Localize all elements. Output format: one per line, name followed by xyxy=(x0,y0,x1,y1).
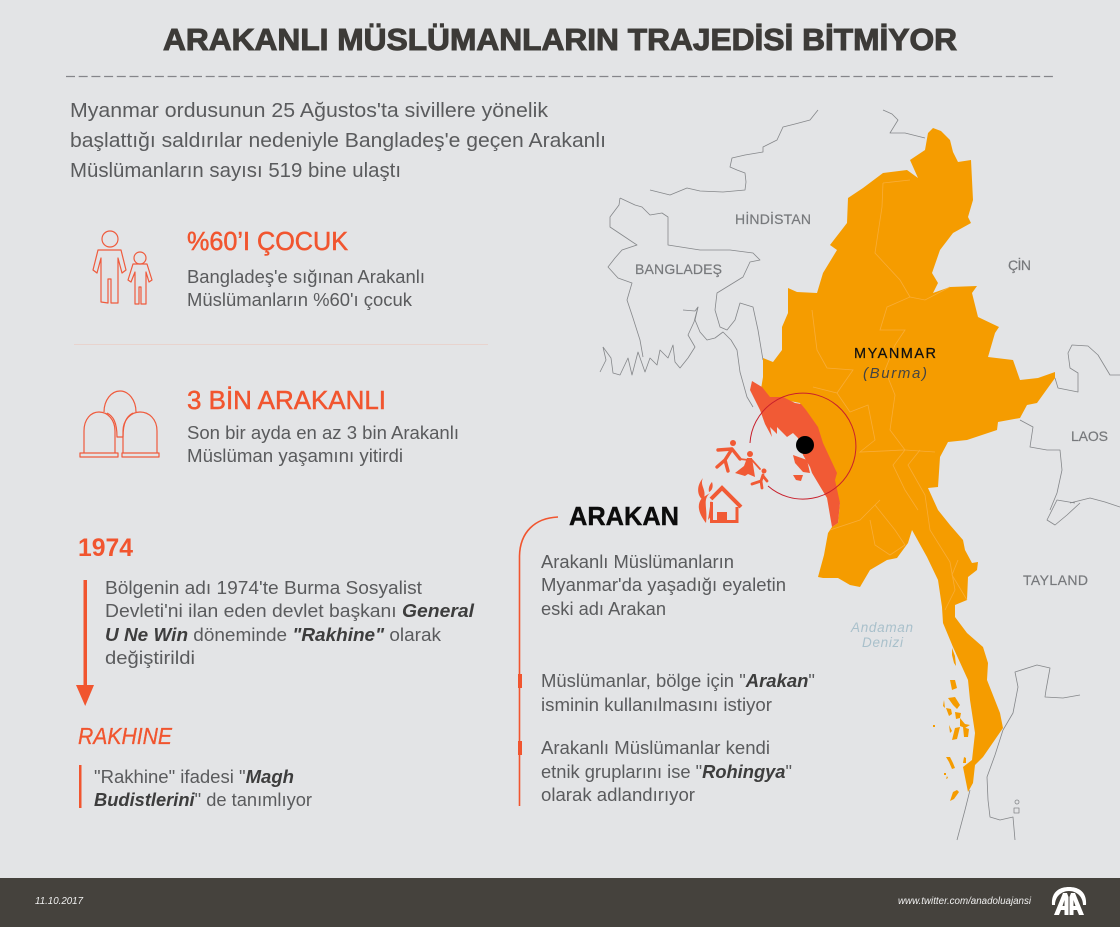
map: target circle xyxy=(750,393,856,499)
text: children detail xyxy=(187,267,425,310)
heading: Rakhine: RAKHINE xyxy=(78,723,173,749)
map: Myanmar xyxy=(760,128,1055,801)
label: Burma: (Burma) xyxy=(863,365,927,382)
text: name change: U Ne Win döneminde "Rakhine" olarak xyxy=(105,625,442,645)
label: Andaman Sea: Andaman xyxy=(850,620,913,635)
text: name change: Devleti'ni ilan eden devlet başkanı General xyxy=(105,601,475,621)
stat: deaths xyxy=(80,386,459,466)
icon: adult and child xyxy=(93,231,152,304)
icon: fleeing family xyxy=(717,440,767,488)
footer xyxy=(0,878,1120,927)
intro text: Myanmar ordusunun 25 Ağustos'ta sivillere yönelik xyxy=(70,99,549,122)
icon: gravestones xyxy=(80,391,159,457)
bar: Rakhine xyxy=(79,765,82,808)
heading: 60 percent: %60’I ÇOCUK xyxy=(187,228,348,256)
text: Arakan 1 xyxy=(541,552,786,619)
timeline line xyxy=(518,517,558,806)
map: Arakan region xyxy=(750,381,840,527)
text: name change xyxy=(105,578,475,668)
text: Arakan 1: eski adı Arakan xyxy=(541,599,666,619)
map: neighbouring country borders xyxy=(600,110,1120,840)
map: internal state lines xyxy=(812,180,967,610)
text: Rakhine detail xyxy=(94,767,312,810)
map labels xyxy=(635,210,1108,588)
label: Andaman Sea xyxy=(850,620,913,650)
text: Rakhine detail: Budistlerini" de tanımlıyor xyxy=(94,790,312,810)
map labels: BANGLADEŞ xyxy=(635,261,722,277)
stat: children xyxy=(93,228,425,310)
text: deaths detail: Müslüman yaşamını yitirdi xyxy=(187,446,403,466)
heading: 3 thousand: 3 BİN ARAKANLI xyxy=(187,386,386,415)
text: Arakan 3 xyxy=(541,738,792,805)
text: Arakan 2: Müslümanlar, bölge için "Arakan" xyxy=(541,671,815,691)
text: children detail: Bangladeş'e sığınan Arakanlı xyxy=(187,267,425,287)
text: Arakan 1: Myanmar'da yaşadığı eyaletin xyxy=(541,575,786,595)
footer date: 11.10.2017 xyxy=(35,896,83,907)
footer url: www.twitter.com/anadoluajansi xyxy=(898,896,1032,907)
intro text: Müslümanların sayısı 519 bine ulaştı xyxy=(70,159,401,182)
intro text: başlattığı saldırılar nedeniyle Bangladeş'e geçen Arakanlı xyxy=(70,129,606,152)
text: name change: Bölgenin adı 1974'te Burma Sosyalist xyxy=(105,578,422,598)
intro text xyxy=(70,99,606,182)
text: Rakhine detail: "Rakhine" ifadesi "Magh xyxy=(94,767,294,787)
text: Arakan 2 xyxy=(541,671,815,715)
text: children detail: Müslümanların %60'ı çocuk xyxy=(187,290,413,310)
heading: 1974: 1974 xyxy=(78,534,133,562)
text: Arakan 3: olarak adlandırıyor xyxy=(541,785,695,805)
title: ARAKANLI MÜSLÜMANLARIN TRAJEDİSİ BİTMİYOR xyxy=(163,22,957,57)
arrow: 1974 to Rakhine xyxy=(76,580,94,706)
label: Myanmar: MYANMAR xyxy=(854,346,936,362)
map labels: ÇİN xyxy=(1008,256,1031,273)
text: Arakan 3: Arakanlı Müslümanlar kendi xyxy=(541,738,770,758)
text: deaths detail: Son bir ayda en az 3 bin Arakanlı xyxy=(187,423,459,443)
text: deaths detail xyxy=(187,423,459,466)
icon: burning house xyxy=(698,478,741,523)
map: location dot xyxy=(796,436,814,454)
map labels: TAYLAND xyxy=(1023,572,1088,588)
text: Arakan 1: Arakanlı Müslümanların xyxy=(541,552,734,572)
text: name change: değiştirildi xyxy=(105,648,195,668)
text: Arakan 3: etnik gruplarını ise "Rohingya" xyxy=(541,762,792,782)
map labels: LAOS xyxy=(1071,428,1108,444)
map labels: HİNDİSTAN xyxy=(735,210,811,227)
logo: AA xyxy=(1052,887,1086,915)
label: Andaman Sea: Denizi xyxy=(862,635,904,650)
heading: Arakan: ARAKAN xyxy=(569,501,679,531)
text: Arakan 2: isminin kullanılmasını istiyor xyxy=(541,695,772,715)
